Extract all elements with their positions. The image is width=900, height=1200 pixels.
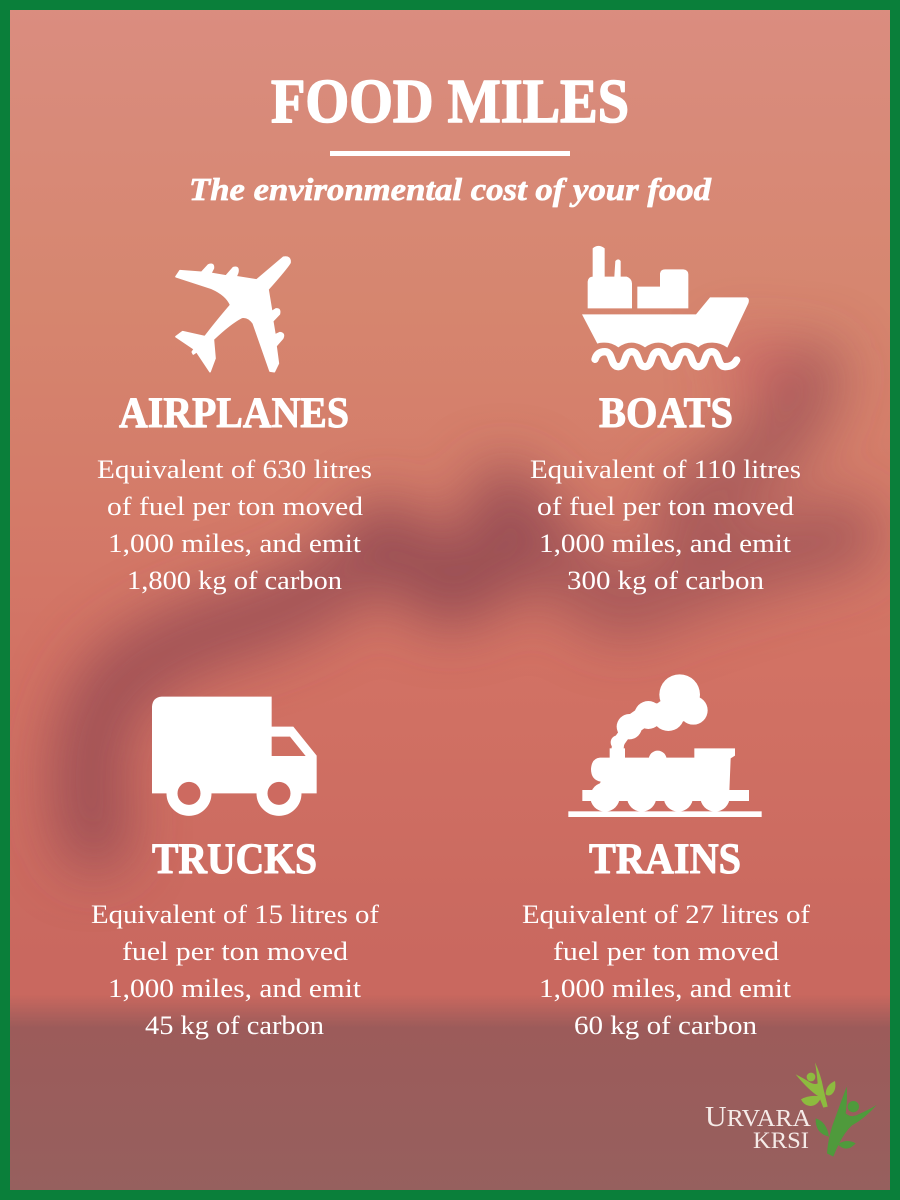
text: trains description: fuel per ton moved <box>553 937 779 966</box>
logo text: URVARA <box>705 1102 812 1133</box>
icon: ship <box>582 246 749 367</box>
panel: trains <box>522 674 810 1040</box>
text: trains description: 60 kg of carbon <box>574 1011 757 1040</box>
logo text: KRSI <box>753 1128 809 1153</box>
icon: truck <box>152 697 317 810</box>
heading: airplanes: AIRPLANES <box>119 390 349 437</box>
panel: boats <box>530 246 801 595</box>
subtitle: The environmental cost of your food <box>189 171 712 207</box>
icon: steam train <box>568 674 762 817</box>
text: boats description: 1,000 miles, and emit <box>539 529 792 558</box>
text: trucks description: fuel per ton moved <box>122 937 348 966</box>
text: boats description: 300 kg of carbon <box>567 566 764 595</box>
text: boats description <box>530 455 801 595</box>
heading: trains: TRAINS <box>589 836 741 883</box>
text: airplanes description <box>97 455 372 595</box>
icon: light green sprout <box>796 1062 835 1108</box>
panel: trucks <box>91 697 379 1040</box>
title underline <box>330 151 570 156</box>
text: trucks description <box>91 900 379 1040</box>
text: trucks description: 45 kg of carbon <box>145 1011 324 1040</box>
logo text <box>705 1102 812 1153</box>
panel: airplanes <box>97 257 372 595</box>
text: boats description: of fuel per ton moved <box>537 492 794 521</box>
logo: Urvara Krsi <box>705 1062 877 1157</box>
text: trains description <box>522 900 810 1040</box>
text: airplanes description: of fuel per ton moved <box>107 492 363 521</box>
text: trucks description: 1,000 miles, and emit <box>108 974 362 1003</box>
title: FOOD MILES <box>271 68 629 136</box>
heading: trucks: TRUCKS <box>152 836 317 883</box>
text: airplanes description: Equivalent of 630 litres <box>97 455 372 484</box>
icon: airplane <box>176 257 290 372</box>
text: boats description: Equivalent of 110 litres <box>530 455 801 484</box>
text: trucks description: Equivalent of 15 litres of <box>91 900 379 929</box>
icon: dark green sprout <box>816 1087 877 1157</box>
text: airplanes description: 1,800 kg of carbon <box>127 566 342 595</box>
text: trains description: 1,000 miles, and emit <box>539 974 792 1003</box>
text: trains description: Equivalent of 27 litres of <box>522 900 810 929</box>
heading: boats: BOATS <box>599 390 733 437</box>
text: airplanes description: 1,000 miles, and emit <box>108 529 362 558</box>
